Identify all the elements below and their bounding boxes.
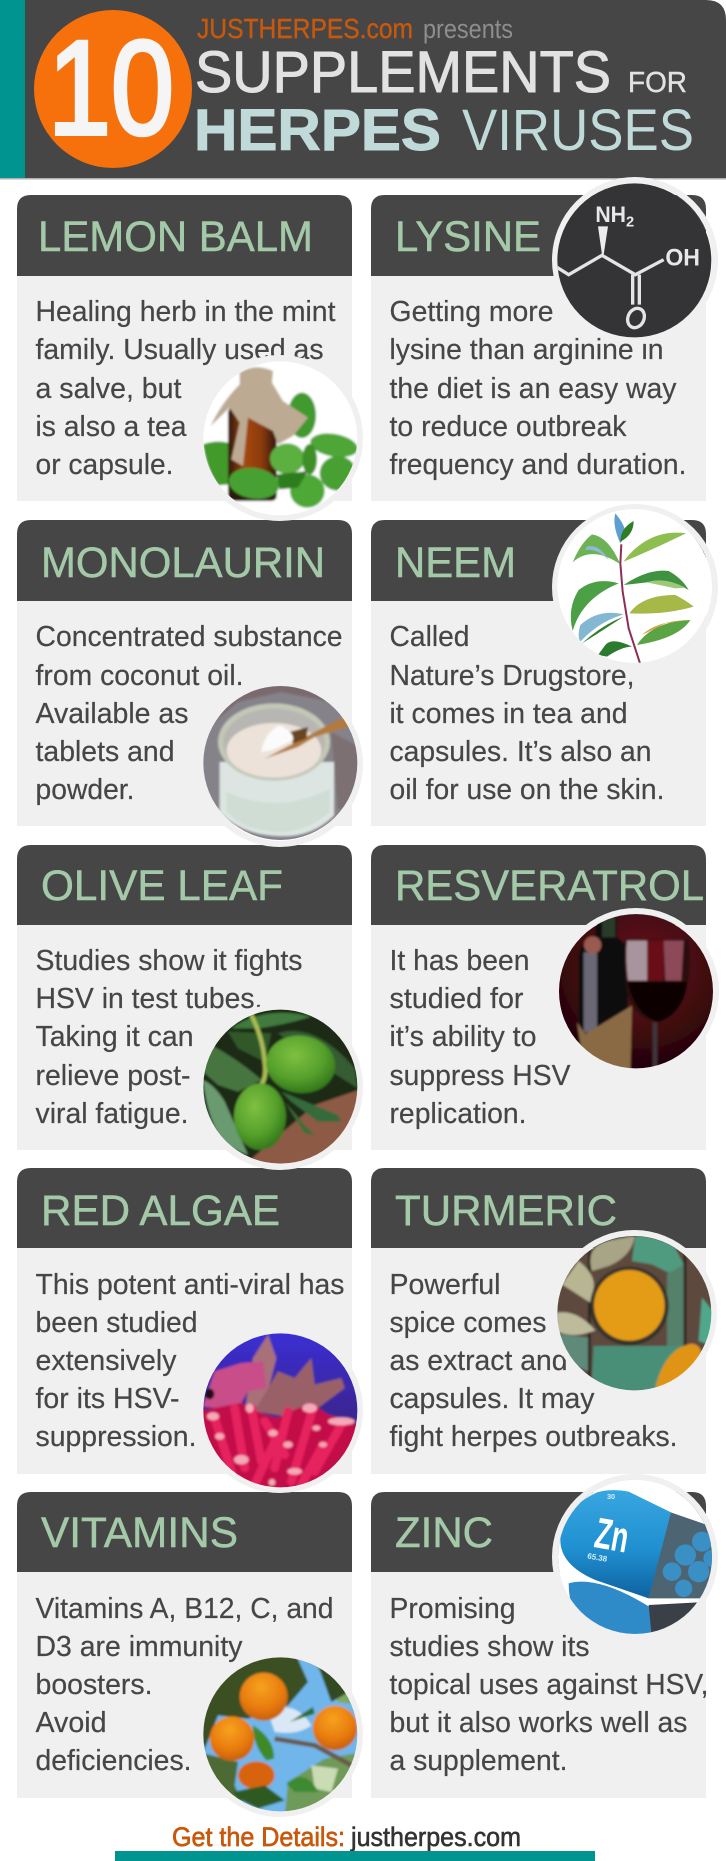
panel: monolaurin (17, 520, 352, 826)
text: monolaurin: Available as (36, 698, 188, 730)
text: lemon balm (36, 296, 336, 481)
title: HERPES (194, 98, 441, 163)
text: neem: capsules. It’s also an (390, 736, 652, 768)
text: resveratrol: suppress HSV (390, 1060, 571, 1092)
text: olive leaf: Studies show it fights (36, 945, 302, 977)
icon: zinc capsule photo: 65.38 (587, 1551, 608, 1564)
text: zinc: topical uses against HSV, (390, 1669, 708, 1701)
text: resveratrol: it’s ability to (390, 1021, 536, 1053)
icon: lysine molecule photo: NH (595, 202, 626, 227)
brand line: JUSTHERPES.com (197, 13, 413, 44)
icon: zinc capsule photo (552, 1475, 721, 1640)
text: resveratrol (390, 945, 571, 1130)
text: red algae: This potent anti-viral has (36, 1269, 344, 1301)
text: lemon balm: a salve, but (36, 373, 182, 405)
icon: coconut oil jar photo (198, 682, 363, 847)
text: lysine: lysine than arginine in (390, 334, 664, 366)
text: vitamins (36, 1593, 334, 1777)
text: olive leaf: HSV in test tubes. (36, 983, 262, 1015)
icon: neem leaf illustration (552, 505, 717, 670)
text: red algae: been studied (36, 1307, 198, 1339)
teal accent stripe (0, 0, 25, 178)
brand line: presents (423, 14, 513, 44)
text: turmeric: as extract and (390, 1345, 568, 1377)
text: lemon balm: or capsule. (36, 449, 174, 481)
text: turmeric: fight herpes outbreaks. (390, 1421, 678, 1453)
text: neem: it comes in tea and (390, 698, 628, 730)
icon: lemon balm photo (198, 356, 363, 521)
text: zinc: Promising (390, 1593, 516, 1625)
icon: oranges photo (198, 1652, 363, 1817)
text: olive leaf: Taking it can (36, 1021, 194, 1053)
footer call to action: justherpes.com (350, 1822, 521, 1852)
teal footer bar (115, 1851, 595, 1861)
icon: lysine molecule photo: 2 (626, 215, 634, 231)
heading: zinc: ZINC (395, 1509, 493, 1557)
heading: olive leaf: OLIVE LEAF (41, 862, 283, 910)
icon: turmeric bowl photo (552, 1231, 717, 1396)
text: vitamins: boosters. (36, 1669, 152, 1701)
text: turmeric: Powerful (390, 1269, 500, 1301)
heading: monolaurin: MONOLAURIN (41, 539, 325, 587)
text: neem (390, 621, 664, 806)
text: zinc: but it also works well as (390, 1707, 688, 1739)
text: monolaurin: from coconut oil. (36, 660, 244, 692)
text: lysine: to reduce outbreak (390, 411, 627, 443)
text: vitamins: Avoid (36, 1707, 106, 1739)
text: red algae: suppression. (36, 1421, 196, 1453)
icon: olive photo (198, 1005, 363, 1170)
text: red algae (36, 1269, 344, 1453)
text: lemon balm: is also a tea (36, 411, 187, 443)
panel: lemon balm (17, 195, 352, 501)
text: zinc: studies show its (390, 1631, 590, 1663)
panel: neem (371, 520, 706, 826)
text: lysine: frequency and duration. (390, 449, 686, 481)
icon: zinc capsule photo: 30 (607, 1492, 615, 1501)
text: red algae: for its HSV- (36, 1383, 180, 1415)
text: monolaurin: tablets and (36, 736, 174, 768)
panel: lysine (371, 195, 706, 501)
text: turmeric: spice comes (390, 1307, 546, 1339)
heading: resveratrol: RESVERATROL (395, 862, 704, 910)
text: lysine (390, 296, 686, 481)
header background (25, 0, 726, 178)
title (194, 40, 694, 163)
text: olive leaf: viral fatigue. (36, 1098, 188, 1130)
title: SUPPLEMENTS (195, 40, 611, 105)
panel: zinc (371, 1492, 708, 1798)
panel: resveratrol (371, 845, 706, 1150)
panel: red algae (17, 1168, 352, 1474)
text: red algae: extensively (36, 1345, 177, 1377)
text: olive leaf (36, 945, 302, 1130)
icon: zinc capsule photo: Zn (591, 1509, 632, 1563)
text: vitamins: Vitamins A, B12, C, and (36, 1593, 334, 1625)
title: VIRUSES (462, 98, 694, 163)
text: resveratrol: It has been (390, 945, 530, 977)
text: turmeric (390, 1269, 678, 1453)
footer call to action (172, 1822, 521, 1852)
text: lemon balm: family. Usually used as (36, 334, 324, 366)
header banner (0, 0, 726, 180)
text: resveratrol: studied for (390, 983, 524, 1015)
heading: vitamins: VITAMINS (41, 1509, 238, 1557)
text: resveratrol: replication. (390, 1098, 526, 1130)
text: vitamins: D3 are immunity (36, 1631, 243, 1663)
text: monolaurin: powder. (36, 774, 134, 806)
footer call to action: Get the Details: (172, 1822, 345, 1852)
text: monolaurin (36, 621, 342, 806)
text: olive leaf: relieve post- (36, 1060, 190, 1092)
text: lysine: Getting more (390, 296, 554, 328)
title: FOR (628, 67, 687, 99)
orange number badge: 10 (48, 14, 174, 163)
heading: lysine: LYSINE (395, 213, 541, 261)
panel: turmeric (371, 1168, 706, 1474)
icon: red wine photo (552, 909, 717, 1074)
heading: red algae: RED ALGAE (41, 1187, 280, 1235)
text: lysine: the diet is an easy way (390, 373, 677, 405)
panel: vitamins (17, 1492, 352, 1798)
icon: lysine molecule photo: OH (665, 244, 700, 271)
text: monolaurin: Concentrated substance (36, 621, 342, 653)
heading: lemon balm: LEMON BALM (38, 213, 313, 261)
text: zinc (390, 1593, 708, 1777)
heading: turmeric: TURMERIC (395, 1187, 617, 1235)
heading: neem: NEEM (395, 539, 516, 587)
text: neem: oil for use on the skin. (390, 774, 664, 806)
text: vitamins: deficiencies. (36, 1745, 192, 1777)
icon: red algae coral photo (198, 1328, 363, 1493)
text: neem: Called (390, 621, 470, 653)
icon: lysine molecule photo (552, 178, 717, 343)
text: turmeric: capsules. It may (390, 1383, 595, 1415)
text: neem: Nature’s Drugstore, (390, 660, 634, 692)
text: zinc: a supplement. (390, 1745, 568, 1777)
panel: olive leaf (17, 845, 352, 1150)
text: lemon balm: Healing herb in the mint (36, 296, 336, 328)
